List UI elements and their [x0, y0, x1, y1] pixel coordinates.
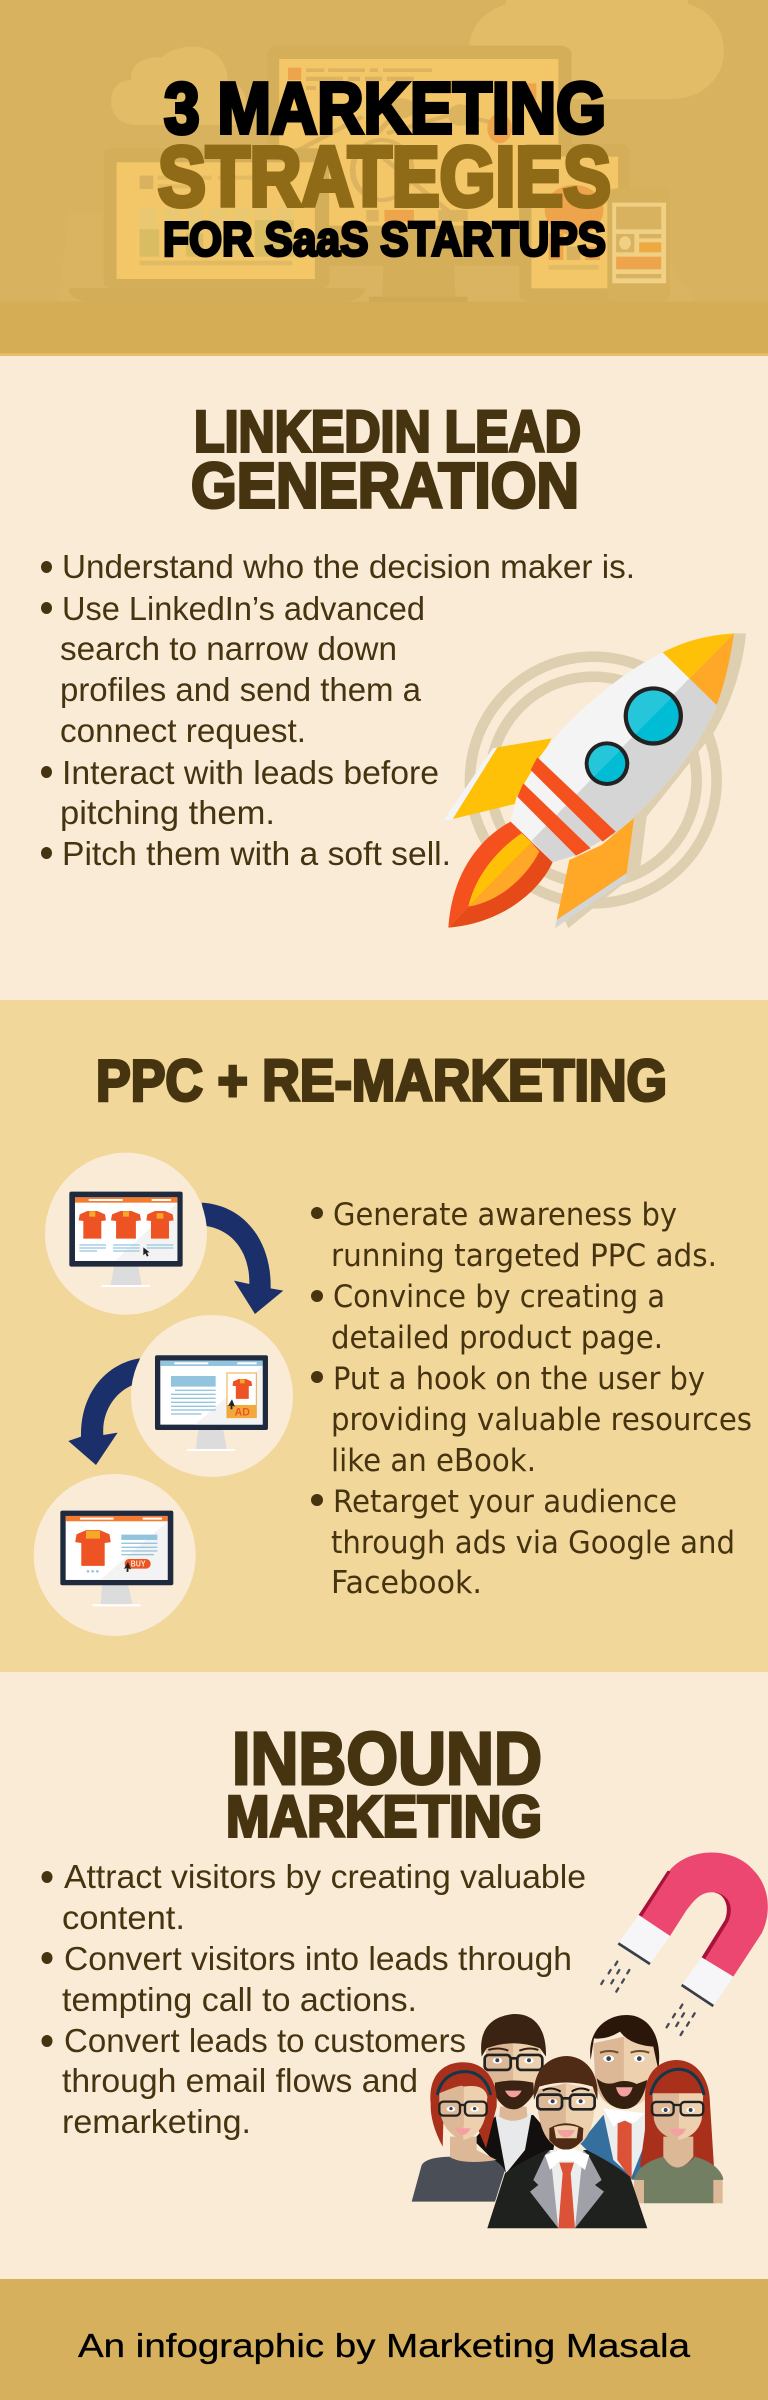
- bullet list: inbound steps: tempting call to actions.: [62, 1981, 417, 2018]
- monitor: product page with ad: [131, 1315, 293, 1477]
- header illustration: devices and clouds: [0, 0, 768, 356]
- monitor: product page with ad: AD: [235, 1407, 250, 1419]
- bullet list: inbound steps: Convert visitors into leads through: [64, 1940, 572, 1977]
- bullet list: LinkedIn steps: connect request.: [60, 712, 306, 749]
- bullet list: inbound steps: remarketing.: [62, 2103, 251, 2140]
- person: man back right: [580, 2015, 659, 2180]
- bullet list: PPC steps: providing valuable resources: [331, 1402, 752, 1438]
- monitor: product detail with buy button: [34, 1474, 196, 1636]
- icon: rocket: [443, 633, 746, 928]
- bullet list: LinkedIn steps: search to narrow down: [60, 630, 397, 667]
- bullet list: PPC steps: like an eBook.: [331, 1443, 536, 1479]
- bullet list: LinkedIn steps: Understand who the decision maker is.: [62, 548, 635, 585]
- bullet list: inbound steps: Convert leads to customers: [64, 2022, 466, 2059]
- title: [158, 69, 611, 266]
- bullet list: inbound steps: [42, 1858, 586, 2140]
- bullet list: PPC steps: Convince by creating a: [333, 1279, 665, 1315]
- title: 3 MARKETING: [164, 69, 606, 149]
- bullet list: LinkedIn steps: Interact with leads before: [62, 754, 439, 791]
- bullet list: PPC steps: [311, 1197, 752, 1601]
- heading: inbound marketing: MARKETING: [226, 1784, 542, 1850]
- arrow: first to second: [202, 1203, 283, 1314]
- panel: footer: [0, 2279, 768, 2400]
- person: woman left: [412, 2062, 505, 2202]
- icon: magnet: [601, 1852, 768, 2035]
- bullet list: LinkedIn steps: Pitch them with a soft sell.: [62, 835, 451, 872]
- illustration: magnet and team: [412, 1852, 768, 2228]
- panel: LinkedIn lead generation: [0, 356, 768, 1000]
- bullet list: PPC steps: through ads via Google and: [331, 1525, 735, 1561]
- bullet list: inbound steps: Attract visitors by creating valuable: [64, 1858, 586, 1895]
- bullet list: LinkedIn steps: profiles and send them a: [60, 671, 422, 708]
- person: man front: [487, 2056, 647, 2228]
- title: STRATEGIES: [158, 130, 611, 224]
- arrow: second to third: [68, 1358, 140, 1465]
- heading: PPC + Re-marketing: PPC + RE-MARKETING: [96, 1048, 667, 1114]
- person: man back left: [473, 2014, 555, 2173]
- bullet list: PPC steps: running targeted PPC ads.: [331, 1238, 717, 1274]
- monitor: product detail with buy button: BUY: [131, 1559, 146, 1569]
- bullet list: PPC steps: detailed product page.: [331, 1320, 663, 1356]
- bullet list: inbound steps: content.: [62, 1899, 185, 1936]
- monitor: product listing: [45, 1153, 207, 1315]
- heading: inbound marketing: [226, 1717, 542, 1850]
- heading: LinkedIn lead generation: [191, 400, 581, 522]
- panel: inbound marketing: [0, 1672, 768, 2279]
- heading: LinkedIn lead generation: LINKEDIN LEAD: [194, 400, 581, 464]
- bullet list: PPC steps: Retarget your audience: [333, 1484, 677, 1520]
- bullet list: LinkedIn steps: pitching them.: [60, 794, 275, 831]
- flow diagram: three monitors with arrows: [34, 1153, 293, 1636]
- bullet list: LinkedIn steps: [41, 548, 635, 872]
- bullet list: PPC steps: Facebook.: [331, 1565, 482, 1601]
- footer credit: An infographic by Marketing Masala: [78, 2327, 691, 2364]
- heading: inbound marketing: INBOUND: [232, 1717, 542, 1800]
- title: FOR SaaS STARTUPS: [163, 214, 606, 266]
- heading: LinkedIn lead generation: GENERATION: [191, 450, 579, 522]
- bullet list: LinkedIn steps: Use LinkedIn’s advanced: [62, 590, 425, 627]
- person: woman right: [634, 2060, 723, 2203]
- bullet list: inbound steps: through email flows and: [62, 2062, 418, 2099]
- bullet list: PPC steps: Put a hook on the user by: [333, 1361, 705, 1397]
- bullet list: PPC steps: Generate awareness by: [333, 1197, 677, 1233]
- panel: PPC and re-marketing: [0, 1000, 768, 1672]
- panel: header: [0, 0, 768, 356]
